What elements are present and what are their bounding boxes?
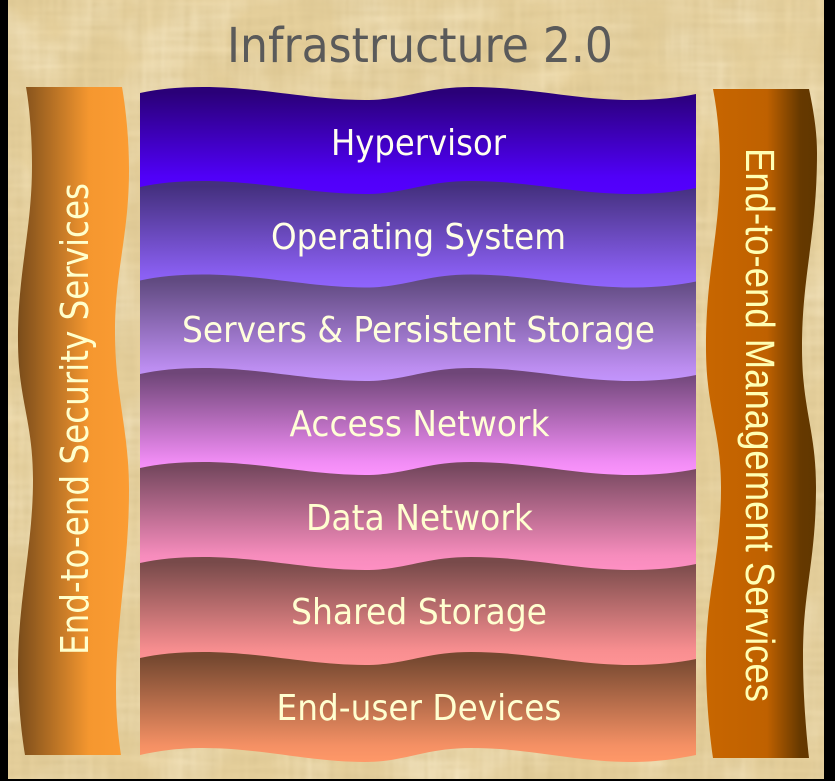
left ribbon label: End-to-end Security Services xyxy=(53,183,97,655)
right ribbon label: End-to-end Management Services xyxy=(737,148,783,702)
layer: hypervisor xyxy=(140,87,696,197)
panel: end-to-end security services xyxy=(18,87,129,755)
layer: hypervisor: Hypervisor xyxy=(331,123,506,164)
layer: shared storage: Shared Storage xyxy=(291,592,547,633)
layer: operating system xyxy=(140,181,696,291)
title: Infrastructure 2.0 xyxy=(227,18,613,74)
left ribbon shape xyxy=(18,87,129,755)
layer: access network xyxy=(140,368,696,478)
layer: servers and persistent storage xyxy=(140,274,696,384)
layer: data network: Data Network xyxy=(306,498,533,539)
panel: end-to-end management services xyxy=(706,89,817,758)
layer: servers and persistent storage: Servers & Persistent Storage xyxy=(182,310,655,351)
layer: shared storage xyxy=(140,557,696,667)
layer: operating system: Operating System xyxy=(271,217,566,258)
layer: end-user devices: End-user Devices xyxy=(276,688,562,729)
layer: data network xyxy=(140,462,696,572)
right ribbon shape xyxy=(706,89,817,758)
layer: end-user devices xyxy=(140,652,696,762)
panel: infrastructure layer stack xyxy=(140,87,696,762)
layer: access network: Access Network xyxy=(290,404,550,445)
